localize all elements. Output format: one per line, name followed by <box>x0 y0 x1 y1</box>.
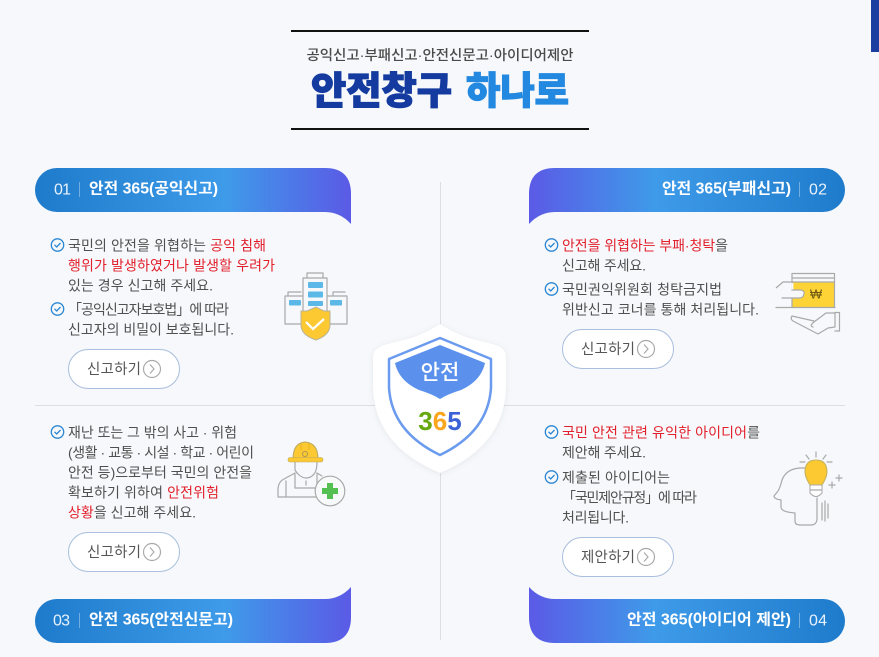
center shield badge: 365 <box>418 406 462 436</box>
header 3 <box>35 587 351 643</box>
header 3: 03 <box>53 612 70 630</box>
button 2: 신고하기 <box>581 341 635 358</box>
text 4: 처리됩니다. <box>562 510 629 526</box>
header 4: 04 <box>809 612 827 630</box>
text 1: 국민의 안전을 위협하는 공익 침해 <box>68 238 266 254</box>
panel 3: 안전신문고 <box>35 425 351 643</box>
center shield badge <box>373 324 506 473</box>
header 1: 안전 365(공익신고) <box>89 180 218 198</box>
text 1: 행위가 발생하였거나 발생할 우려가 <box>68 258 275 274</box>
text 4: 국민 안전 관련 유익한 아이디어를 <box>562 425 760 441</box>
header 2: 안전 365(부패신고) <box>662 180 791 198</box>
title block <box>291 30 589 130</box>
text 4: 「국민제안규정」에 따라 <box>562 490 697 506</box>
button 4: 제안하기 <box>581 549 635 566</box>
header 4 <box>529 587 845 643</box>
button 4 <box>562 538 674 576</box>
header 2 <box>529 168 845 224</box>
text 2 <box>545 238 759 318</box>
icon: money and hands <box>776 274 840 334</box>
text 3 <box>51 425 254 521</box>
button 1: 신고하기 <box>87 361 141 378</box>
header 2: 02 <box>809 182 827 198</box>
icon: money and hands: ₩ <box>810 286 823 302</box>
text 1: 신고자의 비밀이 보호됩니다. <box>68 322 234 338</box>
button 3: 신고하기 <box>87 544 141 561</box>
center vertical divider <box>440 182 441 640</box>
title block: 안전창구 <box>311 71 452 113</box>
text 1 <box>51 238 275 338</box>
header 4: 안전 365(아이디어 제안) <box>627 610 791 628</box>
header 1 <box>35 168 351 224</box>
panel 2: 부패신고 <box>529 168 845 368</box>
text 2: 위반신고 코너를 통해 처리됩니다. <box>562 302 759 318</box>
text 3: 안전 등)으로부터 국민의 안전을 <box>68 465 252 481</box>
icon: building with shield <box>285 273 347 340</box>
text 1: 「공익신고자보호법」에 따라 <box>68 302 229 318</box>
panel 1: 공익신고 <box>35 168 351 388</box>
header 3: 안전 365(안전신문고) <box>89 610 233 628</box>
center horizontal divider <box>35 405 845 406</box>
text 3: (생활 · 교통 · 시설 · 학교 · 어린이 <box>68 445 254 461</box>
icon: worker with plus <box>278 442 345 506</box>
button 1 <box>68 350 180 388</box>
header 1: 01 <box>54 182 71 198</box>
title block: 공익신고·부패신고·안전신문고·아이디어제안 <box>306 47 574 63</box>
icon: head with light bulb <box>774 452 842 525</box>
text 2: 안전을 위협하는 부패·청탁을 <box>562 238 728 254</box>
text 3: 재난 또는 그 밖의 사고 · 위험 <box>68 425 237 441</box>
title block: 하나로 <box>466 71 569 113</box>
text 2: 국민권익위원회 청탁금지법 <box>562 282 722 298</box>
button 2 <box>562 330 674 368</box>
text 3: 확보하기 위하여 안전위험 <box>68 485 219 501</box>
panel 4: 아이디어 제안 <box>529 425 845 643</box>
center shield badge: 안전 <box>421 362 459 384</box>
text 1: 있는 경우 신고해 주세요. <box>68 278 213 294</box>
corner tab <box>871 0 879 52</box>
text 2: 신고해 주세요. <box>562 258 646 274</box>
text 3: 상황을 신고해 주세요. <box>68 505 196 521</box>
text 4: 제출된 아이디어는 <box>562 470 670 486</box>
button 3 <box>68 532 180 572</box>
text 4 <box>545 425 760 526</box>
text 4: 제안해 주세요. <box>562 445 646 461</box>
